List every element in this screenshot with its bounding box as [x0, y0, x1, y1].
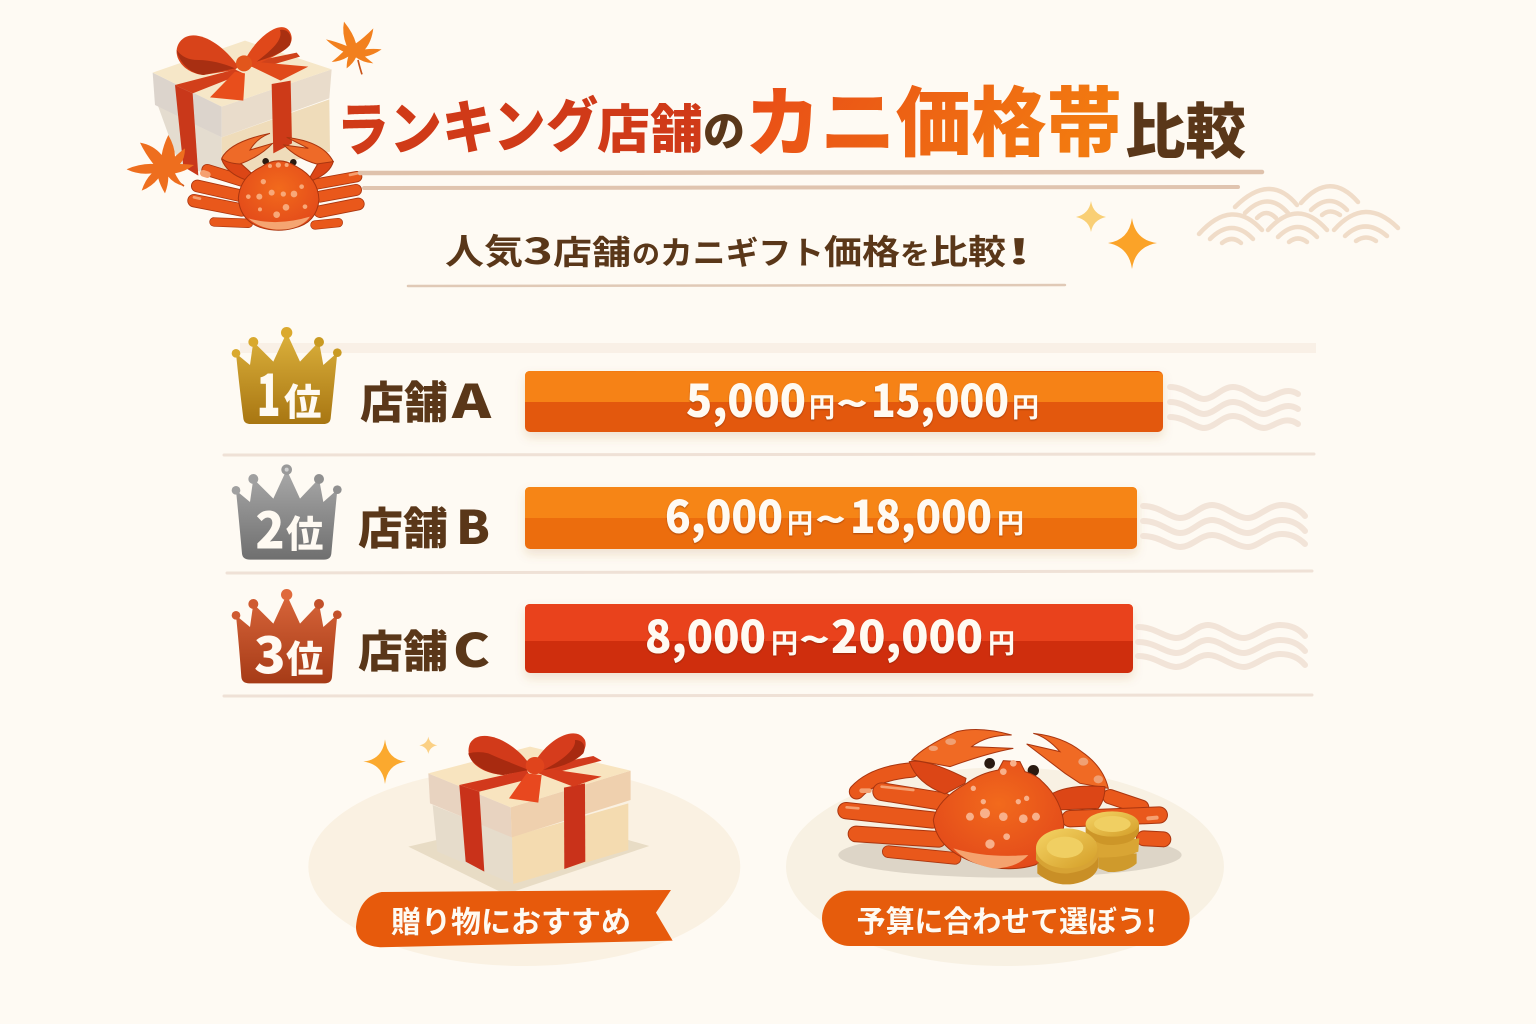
price C: 8,000 — [645, 601, 766, 666]
crown: 3rd place: 3 — [254, 617, 286, 689]
subtitle: 比較 — [930, 225, 1006, 274]
store name C: 店舗 — [358, 616, 448, 680]
crown: 2nd place — [232, 464, 342, 564]
price C: ~ — [799, 612, 830, 664]
store name A: A — [451, 366, 492, 432]
crown: 1st place — [232, 327, 342, 433]
title: 比較 — [1125, 84, 1246, 171]
price A: 15,000 — [871, 365, 1009, 430]
pill banner — [822, 891, 1190, 946]
store name A — [360, 366, 492, 432]
panel: gift recommendation — [308, 733, 740, 966]
price B: ~ — [815, 492, 846, 544]
row divider 1 — [224, 454, 1314, 455]
crown: 1st place: 1 — [257, 350, 281, 433]
wave decoration A — [1170, 387, 1298, 428]
backdrop ellipse — [786, 767, 1224, 966]
store name B: 店舗 — [358, 493, 448, 557]
subtitle: の — [632, 233, 660, 272]
price A — [686, 365, 1039, 430]
crown: 2nd place: 2 — [255, 492, 285, 564]
price A: ~ — [836, 376, 868, 428]
title double rule — [360, 172, 1262, 188]
title: 店舗 — [597, 88, 703, 163]
icon: gift box — [408, 733, 649, 892]
row divider 3 — [224, 695, 1312, 696]
store name C — [358, 615, 490, 681]
banner label: 贈り物におすすめ — [391, 898, 631, 942]
title: の — [703, 98, 745, 159]
price A: 円 — [809, 386, 835, 425]
price B: 18,000 — [850, 481, 992, 546]
title: ランキング — [336, 79, 599, 168]
pill label: 予算に合わせて選ぼう! — [857, 897, 1157, 941]
icon: maple leaf upper right — [326, 22, 382, 74]
icon: crab with coins — [846, 729, 1163, 884]
wave decoration B — [1143, 505, 1305, 547]
icon: header crab — [194, 133, 358, 230]
price bar C — [525, 604, 1133, 673]
subtitle: 店舗 — [553, 226, 631, 274]
subtitle underline — [408, 285, 1065, 286]
ribbon banner — [356, 890, 673, 947]
row divider 2 — [227, 571, 1312, 573]
row 1 — [232, 327, 1298, 433]
table top band — [240, 343, 1316, 353]
subtitle: カニギフト — [660, 228, 824, 274]
store name C: C — [453, 615, 490, 681]
crab shadow — [838, 832, 1182, 878]
price A: 5,000 — [686, 365, 806, 430]
row 2 — [232, 464, 1305, 564]
row 3 — [232, 589, 1305, 689]
store name B — [358, 492, 490, 558]
price B: 円 — [997, 502, 1024, 541]
price bar A — [525, 371, 1163, 432]
store name A: 店舗 — [360, 367, 448, 431]
price B: 円 — [787, 502, 813, 541]
subtitle: 3 — [523, 223, 553, 275]
title: カニ価格帯 — [745, 62, 1122, 172]
pattern: seigaiha waves — [1199, 186, 1398, 243]
coins right stack — [1086, 811, 1139, 872]
crown: 2nd place: 位 — [286, 505, 323, 559]
subtitle: 人気 — [445, 224, 523, 275]
icon: sparkles — [363, 737, 437, 784]
title — [336, 62, 1246, 172]
price B: 6,000 — [665, 481, 783, 546]
crown: 3rd place: 位 — [286, 630, 323, 684]
price C: 円 — [771, 622, 798, 661]
store name B: B — [456, 492, 490, 558]
price C — [645, 601, 1015, 666]
coins left stack — [1036, 828, 1098, 884]
icon: header gift box — [153, 27, 332, 177]
price bar B — [525, 487, 1137, 549]
panel: choose by budget — [786, 729, 1224, 966]
wave decoration C — [1138, 625, 1305, 667]
crown: 1st place: 位 — [284, 372, 321, 426]
price B — [665, 481, 1024, 546]
crown: 3rd place — [232, 589, 342, 689]
subtitle: 価格 — [824, 225, 900, 274]
backdrop ellipse — [308, 767, 740, 966]
price C: 20,000 — [831, 601, 983, 666]
icon: maple leaf lower left — [127, 135, 194, 193]
price A: 円 — [1012, 386, 1039, 425]
price C: 円 — [988, 622, 1015, 661]
icon: sparkles top right — [1076, 201, 1157, 269]
subtitle — [445, 223, 1031, 275]
subtitle: ! — [1007, 225, 1031, 274]
subtitle: を — [900, 233, 930, 273]
